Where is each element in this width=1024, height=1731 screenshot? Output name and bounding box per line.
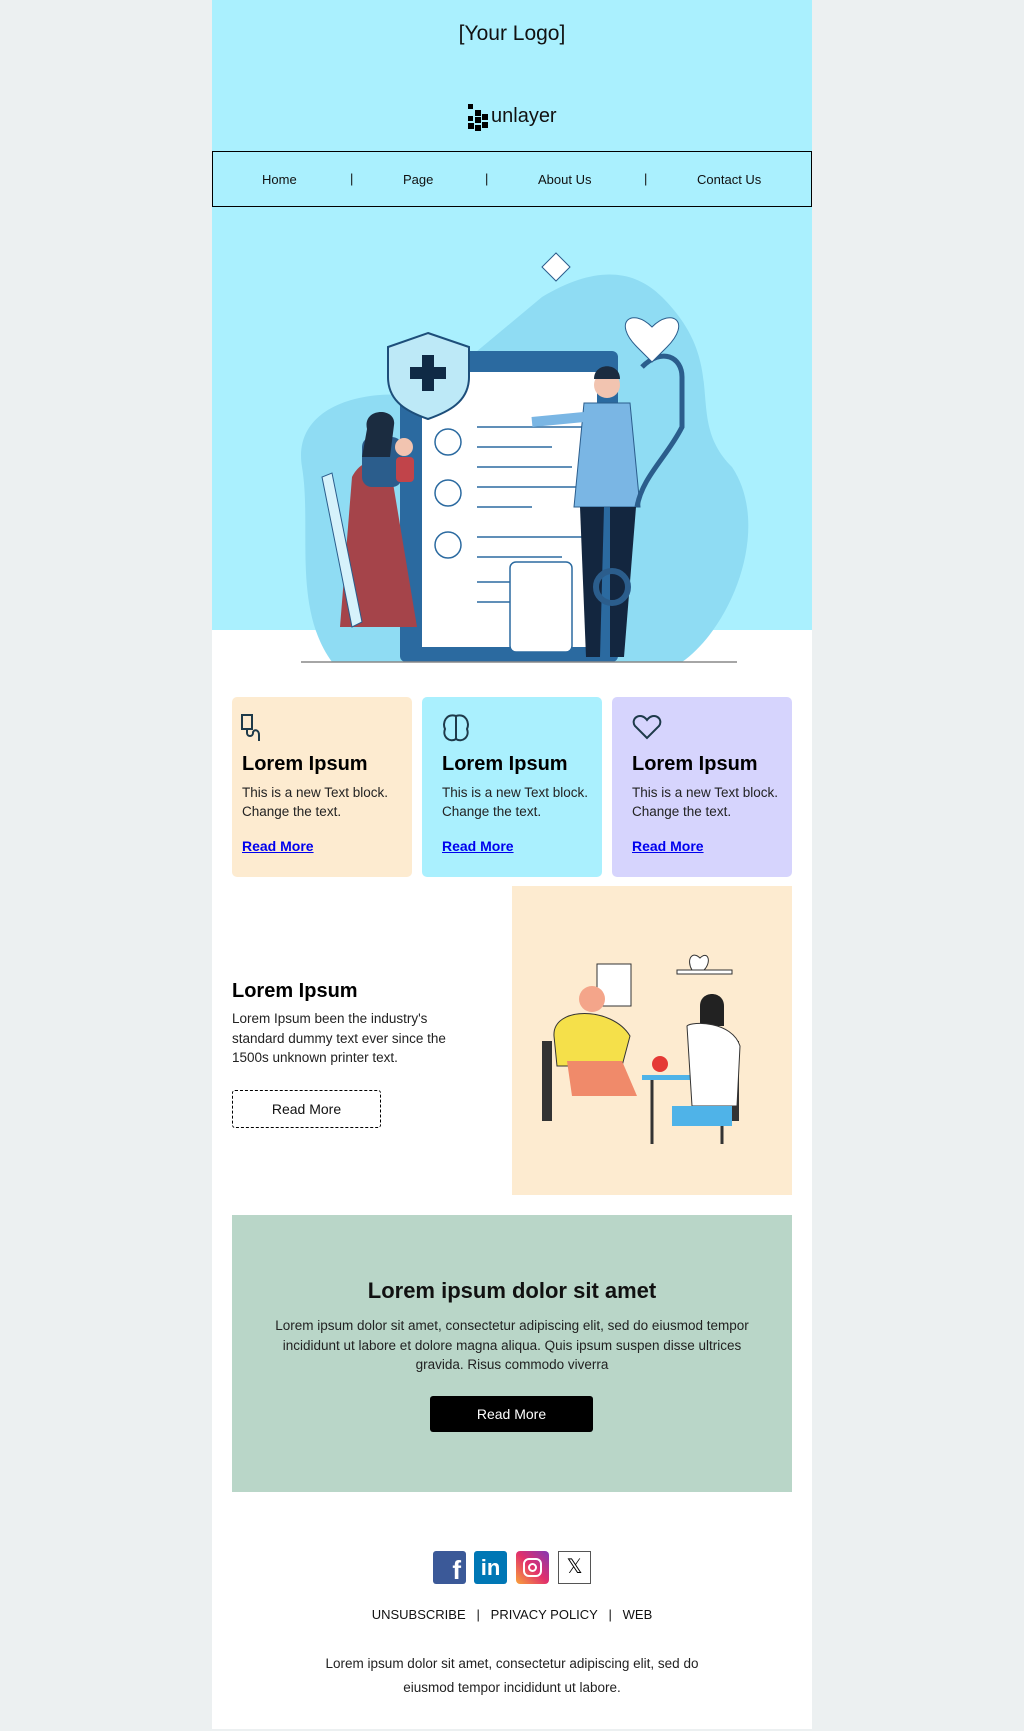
navigation bar: Page (403, 172, 433, 187)
navigation bar: Home (262, 172, 297, 187)
icon: IV bag (241, 714, 260, 741)
card 2: This is a new Text block. Change the text. (442, 785, 588, 819)
section 2 text block (232, 980, 446, 1065)
icon: heart (632, 715, 662, 740)
section 2 text block: Lorem Ipsum (232, 980, 358, 1002)
navigation bar: About Us (538, 172, 591, 187)
card 3: Read More (632, 838, 704, 854)
card 1: Lorem Ipsum (242, 753, 368, 775)
unlayer logo: unlayer (491, 105, 557, 127)
icon: facebook (433, 1551, 466, 1584)
footer text: Lorem ipsum dolor sit amet, consectetur adipiscing elit, sed do eiusmod tempor incididunt ut labore. (326, 1656, 698, 1695)
card 1: Read More (242, 838, 314, 854)
hero illustration (301, 252, 748, 663)
callout body: Lorem ipsum dolor sit amet, consectetur adipiscing elit, sed do eiusmod tempor incididunt ut labore et dolore magna aliqua. Quis ipsum suspen disse ultrices gravida. Risus commodo viverra (275, 1318, 749, 1372)
header background (212, 0, 812, 630)
icon: linkedin: in (481, 1555, 500, 1580)
navigation bar (212, 151, 812, 207)
card 2 (422, 697, 602, 877)
card 3: Lorem Ipsum (632, 753, 758, 775)
card 1 (232, 697, 412, 877)
callout heading: Lorem ipsum dolor sit amet (368, 1278, 656, 1303)
icon: brain (443, 714, 469, 742)
icon: X (558, 1551, 591, 1584)
footer links: UNSUBSCRIBE | PRIVACY POLICY | WEB (372, 1607, 652, 1622)
navigation bar: | (644, 171, 647, 186)
section 2 text block: Lorem Ipsum been the industry's standard dummy text ever since the 1500s unknown printer text. (232, 1011, 446, 1065)
card 2: Lorem Ipsum (442, 753, 568, 775)
card 3: This is a new Text block. Change the text. (632, 785, 778, 819)
button: read more outline: Read More (272, 1101, 341, 1117)
navigation bar: | (350, 171, 353, 186)
card 2: Read More (442, 838, 514, 854)
callout button (430, 1396, 593, 1432)
social icons (433, 1551, 591, 1585)
navigation bar: | (485, 171, 488, 186)
logo text: [Your Logo] (459, 22, 565, 45)
card 3 (612, 697, 792, 877)
consultation illustration (512, 886, 792, 1195)
green callout panel (232, 1215, 792, 1492)
icon: instagram (516, 1551, 549, 1584)
icon: linkedin (474, 1551, 507, 1584)
card 1: This is a new Text block. Change the text. (242, 785, 388, 819)
icon: facebook: f (452, 1555, 461, 1585)
button: read more outline (232, 1090, 381, 1128)
unlayer logo (468, 104, 557, 131)
callout button: Read More (477, 1406, 546, 1422)
navigation bar: Contact Us (697, 172, 761, 187)
icon: X: 𝕏 (566, 1556, 583, 1578)
